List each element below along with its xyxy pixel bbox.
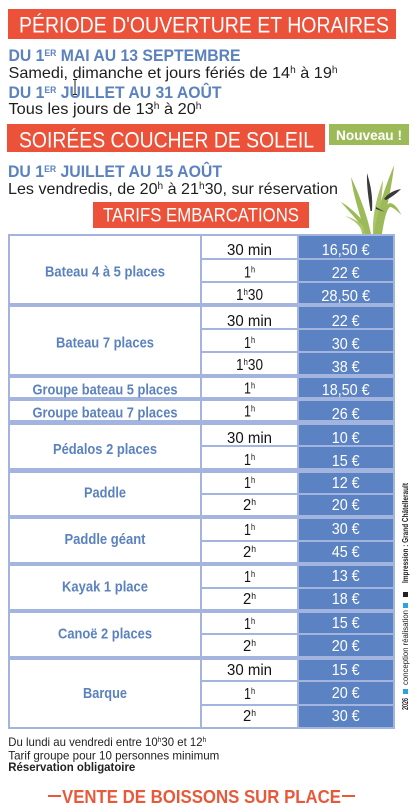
footer: vente de boissons sur place: VENTE DE BOISSONS SUR PLACE bbox=[62, 786, 341, 807]
row group: Paddle: Paddle bbox=[84, 484, 126, 502]
note: group rates: Réservation obligatoire bbox=[8, 760, 136, 774]
row group: Canoë 2 places bbox=[10, 613, 393, 656]
note: group rates: Du lundi au vendredi entre 10 bbox=[8, 735, 166, 749]
row group: Bateau 4 à 5 places bbox=[10, 236, 393, 305]
row group: Pédalos 2 places: Pédalos 2 places bbox=[53, 441, 157, 458]
row group: Groupe bateau 7 places: h bbox=[251, 404, 255, 414]
text block: opening hours: ER bbox=[44, 48, 57, 58]
row group: Pédalos 2 places: h bbox=[251, 452, 255, 462]
text block: sunset evenings: h bbox=[158, 181, 163, 192]
text block: opening hours: à 19 bbox=[296, 65, 332, 82]
row group: Bateau 7 places: 38 € bbox=[332, 359, 360, 376]
row group: Bateau 4 à 5 places: 1 bbox=[244, 264, 253, 282]
row group: Kayak 1 place: 18 € bbox=[332, 591, 360, 608]
icon: reeds bbox=[341, 165, 402, 234]
row group: Paddle: 2 bbox=[243, 497, 252, 514]
row group: Bateau 4 à 5 places: 1 bbox=[236, 287, 245, 304]
heading: soirées coucher de soleil: SOIRÉES COUCHER DE SOLEIL bbox=[19, 128, 314, 152]
row group: Paddle: 12 € bbox=[332, 475, 360, 492]
row group: Pédalos 2 places: 1 bbox=[244, 452, 253, 469]
row group: Kayak 1 place: 13 € bbox=[332, 568, 360, 585]
text block: opening hours: MAI AU 13 SEPTEMBRE bbox=[56, 47, 240, 65]
row group: Paddle bbox=[10, 473, 393, 515]
row group: Paddle: 1 bbox=[244, 475, 253, 492]
text block: sunset evenings: JUILLET AU 15 AOÛT bbox=[56, 162, 222, 181]
row group: Barque: 2 bbox=[243, 708, 252, 725]
text block: opening hours: h bbox=[196, 101, 202, 112]
note: group rates: h bbox=[203, 737, 206, 744]
row group: Kayak 1 place: 2 bbox=[243, 591, 252, 608]
row group: Paddle géant: 1 bbox=[244, 522, 253, 539]
text block: sunset evenings bbox=[8, 162, 338, 198]
text block: opening hours: h bbox=[290, 65, 296, 76]
row group: Paddle géant bbox=[10, 519, 393, 562]
text block: opening hours: à 20 bbox=[159, 101, 196, 118]
row group: Groupe bateau 5 places: 18,50 € bbox=[322, 382, 370, 399]
row group: Groupe bateau 7 places bbox=[10, 401, 393, 423]
text block: opening hours: DU 1 bbox=[8, 84, 46, 102]
vertical credits: Impression : Grand Châtellerault bbox=[401, 483, 410, 583]
text block: sunset evenings: h bbox=[199, 181, 205, 192]
row group: Canoë 2 places: 2 bbox=[243, 638, 252, 655]
row group: Paddle: h bbox=[251, 475, 255, 485]
text block: sunset evenings: à 21 bbox=[163, 181, 199, 198]
row group: Groupe bateau 5 places: 1 bbox=[244, 380, 253, 398]
note: group rates: 30 et 12 bbox=[161, 735, 203, 749]
row group: Paddle géant: 30 € bbox=[332, 521, 360, 538]
row group: Bateau 7 places: 30 min bbox=[227, 313, 272, 330]
note: group rates: h bbox=[158, 737, 162, 744]
row group: Canoë 2 places: 15 € bbox=[332, 615, 360, 632]
text block: opening hours: h bbox=[154, 101, 159, 112]
row group: Canoë 2 places: h bbox=[251, 638, 256, 648]
row group: Pédalos 2 places: 30 min bbox=[227, 430, 272, 447]
icon: text cursor bbox=[73, 80, 77, 94]
text block: opening hours: Tous les jours de 13 bbox=[8, 101, 151, 118]
note: group rates bbox=[8, 735, 219, 774]
row group: Kayak 1 place: Kayak 1 place bbox=[62, 578, 148, 596]
text block: sunset evenings: ER bbox=[44, 164, 57, 174]
text block: opening hours: JUILLET AU 31 AOÛT bbox=[56, 83, 221, 102]
row group: Bateau 4 à 5 places: 16,50 € bbox=[322, 242, 370, 259]
row group: Paddle géant: 45 € bbox=[332, 544, 360, 561]
price table bbox=[8, 234, 395, 729]
row group: Pédalos 2 places bbox=[10, 425, 393, 470]
row group: Groupe bateau 7 places: Groupe bateau 7 places bbox=[32, 404, 178, 422]
row group: Bateau 7 places: Bateau 7 places bbox=[56, 334, 154, 352]
row group: Groupe bateau 5 places: h bbox=[251, 380, 255, 390]
row group: Barque: 30 € bbox=[332, 708, 360, 725]
row group: Kayak 1 place: h bbox=[251, 591, 256, 601]
row group: Barque: 1 bbox=[244, 686, 253, 703]
row group: Kayak 1 place bbox=[10, 566, 393, 609]
row group: Paddle géant: h bbox=[251, 544, 256, 554]
row group: Bateau 4 à 5 places: 22 € bbox=[332, 265, 360, 282]
vertical credits bbox=[401, 483, 410, 710]
note: group rates: Tarif groupe pour 10 personnes minimum bbox=[8, 748, 219, 762]
text block: opening hours: Samedi, dimanche et jours fériés de 14 bbox=[8, 65, 286, 82]
row group: Groupe bateau 5 places bbox=[10, 378, 393, 399]
row group: Bateau 4 à 5 places: 30 min bbox=[227, 242, 272, 259]
row group: Barque: 20 € bbox=[332, 685, 360, 702]
row group: Bateau 4 à 5 places: 28,50 € bbox=[321, 288, 371, 305]
row group: Kayak 1 place: h bbox=[251, 569, 255, 579]
heading: tarifs embarcations: TARIFS EMBARCATIONS bbox=[103, 206, 299, 226]
row group: Bateau 7 places: 22 € bbox=[332, 313, 360, 330]
row group: Bateau 4 à 5 places: Bateau 4 à 5 places bbox=[45, 264, 165, 280]
row group: Bateau 7 places: 1 bbox=[244, 335, 253, 352]
row group: Bateau 7 places bbox=[10, 307, 393, 376]
row group: Paddle géant: Paddle géant bbox=[64, 531, 146, 548]
row group: Bateau 7 places: 30 € bbox=[332, 336, 360, 353]
row group: Groupe bateau 5 places: Groupe bateau 5 places bbox=[32, 382, 178, 398]
row group: Barque: h bbox=[251, 686, 255, 696]
text block: sunset evenings: DU 1 bbox=[8, 163, 46, 181]
row group: Pédalos 2 places: 10 € bbox=[332, 430, 360, 447]
row group: Paddle géant: 2 bbox=[243, 544, 252, 561]
text block: sunset evenings: Les vendredis, de 20 bbox=[8, 181, 157, 198]
row group: Bateau 4 à 5 places: h bbox=[251, 264, 255, 274]
text block: opening hours: DU 1 bbox=[8, 47, 46, 65]
row group: Pédalos 2 places: 15 € bbox=[332, 453, 360, 470]
row group: Barque bbox=[10, 660, 393, 727]
row group: Bateau 7 places: 1 bbox=[236, 357, 245, 374]
text block: opening hours: h bbox=[332, 65, 338, 76]
row group: Bateau 4 à 5 places: h bbox=[244, 287, 248, 297]
vertical credits: 2026 bbox=[401, 698, 410, 710]
row group: Bateau 7 places: h bbox=[251, 335, 255, 345]
row group: Canoë 2 places: 1 bbox=[244, 616, 253, 633]
badge: nouveau: Nouveau ! bbox=[336, 127, 402, 143]
vertical credits: conception réalisation bbox=[401, 610, 410, 685]
row group: Paddle géant: h bbox=[251, 522, 255, 532]
row group: Groupe bateau 7 places: 26 € bbox=[332, 406, 360, 423]
row group: Paddle: 20 € bbox=[332, 497, 360, 514]
row group: Kayak 1 place: 1 bbox=[244, 569, 253, 586]
row group: Canoë 2 places: Canoë 2 places bbox=[58, 626, 152, 642]
row group: Groupe bateau 7 places: 1 bbox=[244, 404, 253, 420]
row group: Barque: 15 € bbox=[332, 662, 360, 679]
text block: sunset evenings: 30, sur réservation bbox=[205, 181, 338, 198]
row group: Bateau 4 à 5 places: 30 bbox=[248, 287, 263, 304]
row group: Bateau 7 places: 30 bbox=[248, 357, 263, 374]
row group: Bateau 7 places: h bbox=[244, 357, 248, 367]
row group: Barque: Barque bbox=[83, 685, 127, 702]
text block: opening hours: ER bbox=[44, 85, 57, 95]
row group: Barque: h bbox=[251, 708, 256, 718]
badge: nouveau bbox=[329, 124, 409, 145]
row group: Canoë 2 places: h bbox=[251, 616, 255, 626]
row group: Barque: 30 min bbox=[227, 662, 272, 679]
text block: opening hours bbox=[8, 47, 338, 118]
row group: Paddle: h bbox=[251, 497, 256, 507]
row group: Canoë 2 places: 20 € bbox=[332, 638, 360, 655]
